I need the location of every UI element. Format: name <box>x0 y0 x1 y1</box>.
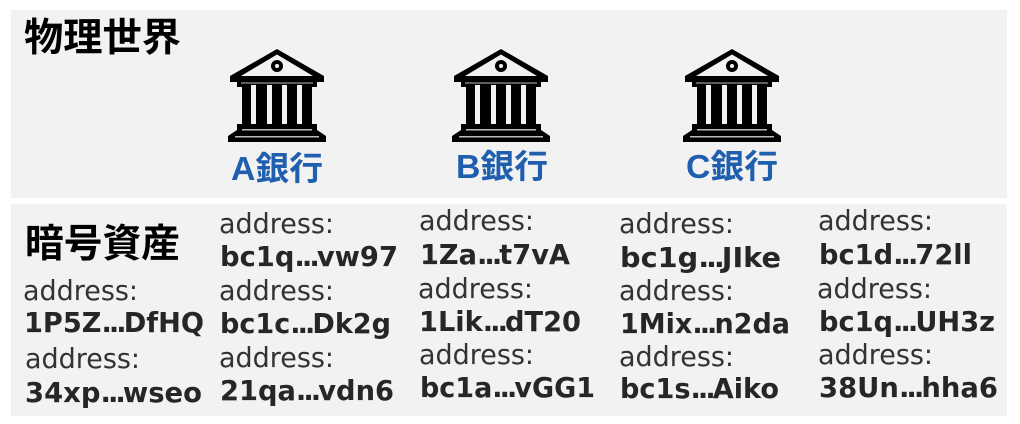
bank C <box>683 49 781 185</box>
address bc1c: bc1c...Dk2g <box>220 307 391 340</box>
icon: bank A <box>228 49 326 142</box>
address bc1a: bc1a...vGG1 <box>420 371 595 404</box>
address 34xp <box>25 342 202 409</box>
address 1P5Z: address: <box>23 274 138 307</box>
label: bank B: B銀行 <box>456 148 548 185</box>
address 1Lik: 1Lik...dT20 <box>419 305 581 338</box>
address 1Mix: address: <box>619 274 734 307</box>
address 1Lik: address: <box>418 272 533 305</box>
address bc1q UH3z: address: <box>817 272 932 305</box>
address bc1q UH3z: bc1q...UH3z <box>819 305 995 338</box>
address bc1g <box>619 207 781 274</box>
bank A <box>228 49 326 187</box>
label: bank C: C銀行 <box>686 148 778 185</box>
panel: physical world <box>11 10 1007 198</box>
bank B <box>452 49 550 185</box>
address bc1s <box>619 340 779 405</box>
address 34xp: address: <box>25 342 140 375</box>
address bc1q vw97: bc1q...vw97 <box>220 240 398 273</box>
address bc1a <box>419 338 595 404</box>
heading: crypto assets: 暗号資産 <box>25 223 180 266</box>
address 38Un <box>818 338 998 404</box>
address bc1g: address: <box>619 207 734 240</box>
label: bank A: A銀行 <box>231 150 323 187</box>
address 38Un: 38Un...hha6 <box>819 371 998 404</box>
address 21qa: 21qa...vdn6 <box>220 374 394 407</box>
address bc1c: address: <box>219 274 334 307</box>
address 1P5Z: 1P5Z...DfHQ <box>24 306 204 339</box>
address 38Un: address: <box>818 338 933 371</box>
address bc1a: address: <box>419 338 534 371</box>
address bc1s: bc1s...Aiko <box>620 372 779 405</box>
address bc1q vw97: address: <box>219 207 334 240</box>
address 1Za: address: <box>419 204 534 237</box>
address 1Za <box>419 204 570 271</box>
address bc1q vw97 <box>219 207 398 273</box>
address bc1s: address: <box>619 340 734 373</box>
address bc1d: bc1d...72ll <box>819 238 972 271</box>
icon: bank B <box>452 49 550 142</box>
address bc1d: address: <box>818 204 933 237</box>
address bc1q UH3z <box>817 272 995 338</box>
panel: crypto assets <box>11 204 1007 416</box>
heading: physical world: 物理世界 <box>24 17 181 60</box>
address 1Mix <box>619 274 790 340</box>
address 1Mix: 1Mix...n2da <box>620 307 790 340</box>
address 21qa: address: <box>219 341 334 374</box>
address bc1d <box>818 204 972 271</box>
icon: bank C <box>683 49 781 142</box>
address bc1g: bc1g...JIke <box>620 241 781 274</box>
address 1Za: 1Za...t7vA <box>420 238 570 271</box>
address 1P5Z <box>23 274 204 339</box>
address 34xp: 34xp...wseo <box>25 376 202 409</box>
address bc1c <box>219 274 391 340</box>
address 1Lik <box>418 272 581 338</box>
address 21qa <box>219 341 394 407</box>
